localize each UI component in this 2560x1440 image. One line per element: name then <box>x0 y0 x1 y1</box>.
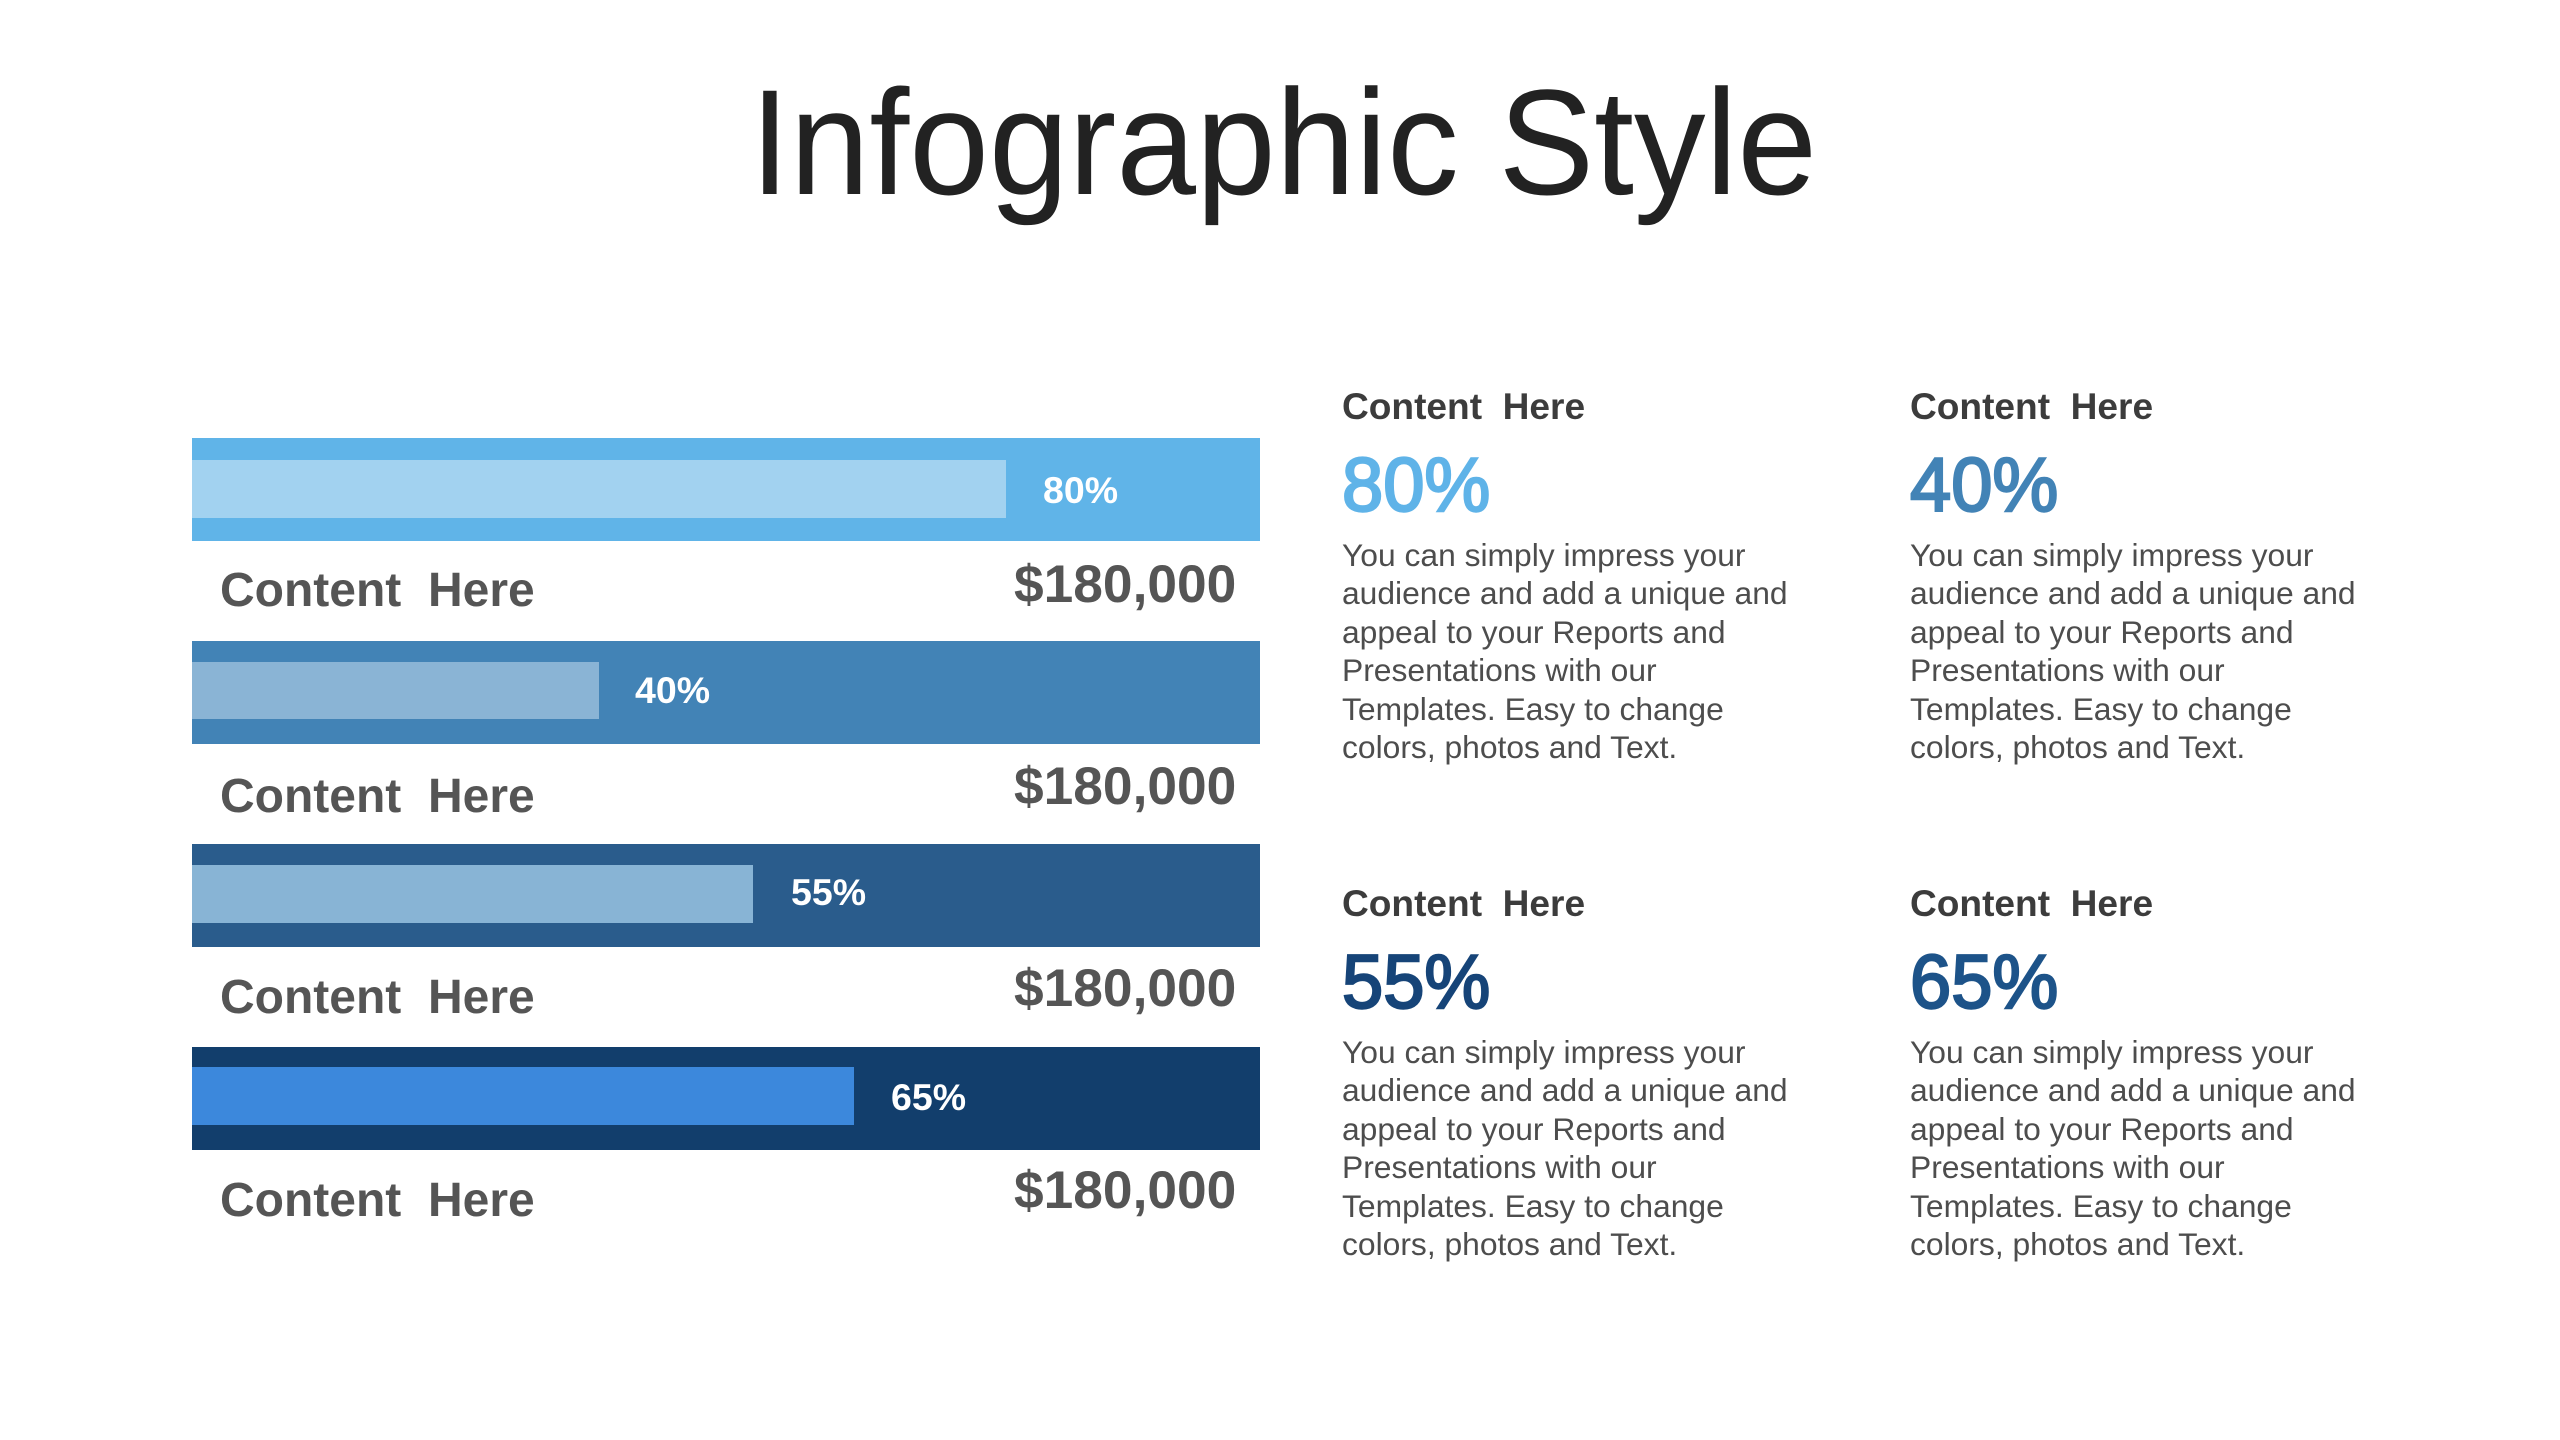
row label 1: Content Here <box>220 564 535 617</box>
amount 4: $180,000 <box>1014 1161 1236 1220</box>
big percent: 40% <box>1910 443 2058 528</box>
heading: Content Here <box>1910 385 2153 427</box>
amount 3: $180,000 <box>1014 958 1236 1018</box>
panel: 40% text block <box>1910 385 2356 765</box>
big percent: 65% <box>1910 940 2058 1025</box>
heading: Content Here <box>1342 882 1585 924</box>
heading: Content Here <box>1910 882 2153 924</box>
bar label 80%: 80% <box>1043 468 1118 510</box>
body text: You can simply impress your audience and add a unique and appeal to your Reports and Presentations with our Templates. Easy to change colors, photos and Text. <box>1342 1034 1788 1262</box>
bar: 80% <box>192 438 1260 540</box>
big percent: 55% <box>1342 940 1490 1025</box>
bar fill 40% <box>192 662 599 719</box>
panel: 65% text block <box>1910 882 2356 1262</box>
bar fill 55% <box>192 865 753 922</box>
row label 2: Content Here <box>220 770 535 822</box>
heading: Content Here <box>1342 385 1585 427</box>
body text: You can simply impress your audience and add a unique and appeal to your Reports and Presentations with our Templates. Easy to change colors, photos and Text. <box>1910 1034 2356 1262</box>
bar: 40% <box>192 640 1260 744</box>
row label 3: Content Here <box>220 971 535 1024</box>
panel: 55% text block <box>1342 882 1788 1262</box>
amount 2: $180,000 <box>1014 756 1236 816</box>
bar fill 80% <box>192 460 1006 518</box>
panel: 80% text block <box>1342 385 1788 765</box>
body text: You can simply impress your audience and add a unique and appeal to your Reports and Presentations with our Templates. Easy to change colors, photos and Text. <box>1910 536 2356 765</box>
bar fill 65% <box>192 1067 854 1125</box>
amount 1: $180,000 <box>1014 555 1236 614</box>
bar label 65%: 65% <box>891 1076 966 1118</box>
bar: 65% <box>192 1047 1260 1150</box>
bar label 40%: 40% <box>635 669 710 711</box>
title: Infographic Style <box>750 58 1817 226</box>
big percent: 80% <box>1342 443 1490 528</box>
body text: You can simply impress your audience and add a unique and appeal to your Reports and Presentations with our Templates. Easy to change colors, photos and Text. <box>1342 536 1788 765</box>
bar label 55%: 55% <box>791 871 866 913</box>
bar: 55% <box>192 844 1260 946</box>
row label 4: Content Here <box>220 1174 535 1227</box>
